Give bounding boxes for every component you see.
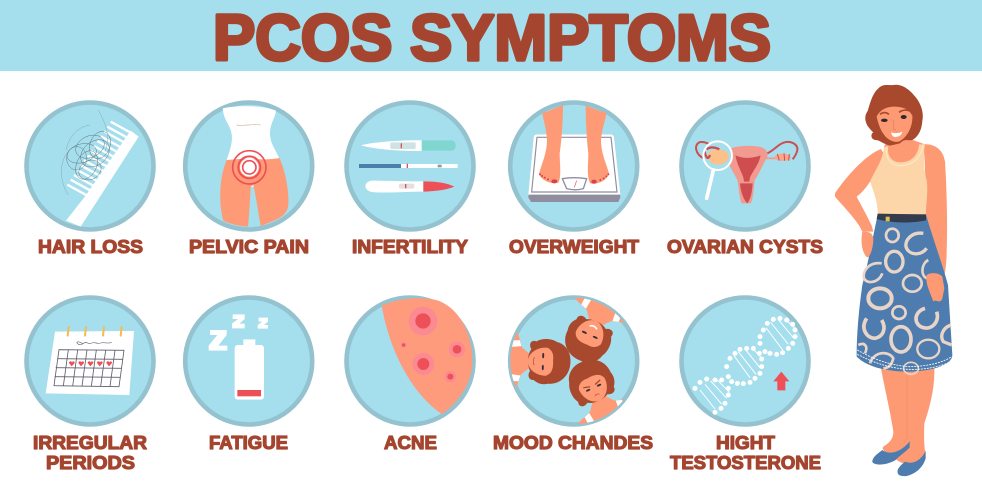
icon: low battery and sleep [209,314,268,400]
panel: hair loss [26,102,154,230]
icon: pregnancy tests [359,140,458,193]
icon: calendar [46,327,134,395]
panel: irregular periods [26,298,154,424]
label: acne: ACNE [384,432,437,453]
label: pelvic pain: PELVIC PAIN [189,236,309,257]
hair [865,85,923,146]
skirt hem [857,350,952,369]
face [877,107,912,142]
title banner [0,0,982,74]
skirt rings [858,229,952,374]
skirt [857,214,952,372]
label: fatigue: FATIGUE [209,432,288,453]
panel: high testosterone [682,298,808,424]
icon: pelvis with pain rings [220,106,288,227]
belt [877,214,926,222]
label: hight testosterone: TESTOSTERONE [670,452,821,473]
icon: skin with acne [382,298,472,414]
label: hair loss: HAIR LOSS [38,236,143,257]
panel: pelvic pain [185,102,312,230]
tank top [870,144,927,217]
label: hight testosterone: HIGHT [716,432,776,453]
legs and shoes [872,368,934,476]
label: mood chandes: MOOD CHANDES [493,432,653,453]
icon: three moods [510,298,624,424]
icon: dna and up arrow [695,318,795,412]
label: irregular periods [33,432,147,473]
label: overweight: OVERWEIGHT [509,236,640,257]
label: ovarian cysts: OVARIAN CYSTS [667,236,823,257]
panel: overweight [510,102,637,230]
front hand [926,273,944,302]
label: infertility: INFERTILITY [352,236,469,257]
panel: acne [346,298,474,424]
icon: comb with hair [61,110,139,227]
icon: feet on scale [528,105,620,202]
label: irregular periods: PERIODS [46,452,135,473]
panel: ovarian cysts [682,102,808,230]
title: PCOS SYMPTOMS [213,1,771,74]
illustration: woman [835,85,952,476]
torso and arms [835,149,888,232]
label: irregular periods: IRREGULAR [33,432,147,453]
panel: fatigue [185,298,312,424]
panel: infertility [346,102,474,230]
label: hight testosterone [670,432,821,473]
panel: mood changes [506,290,637,432]
icon: uterus with magnifier [696,141,797,203]
